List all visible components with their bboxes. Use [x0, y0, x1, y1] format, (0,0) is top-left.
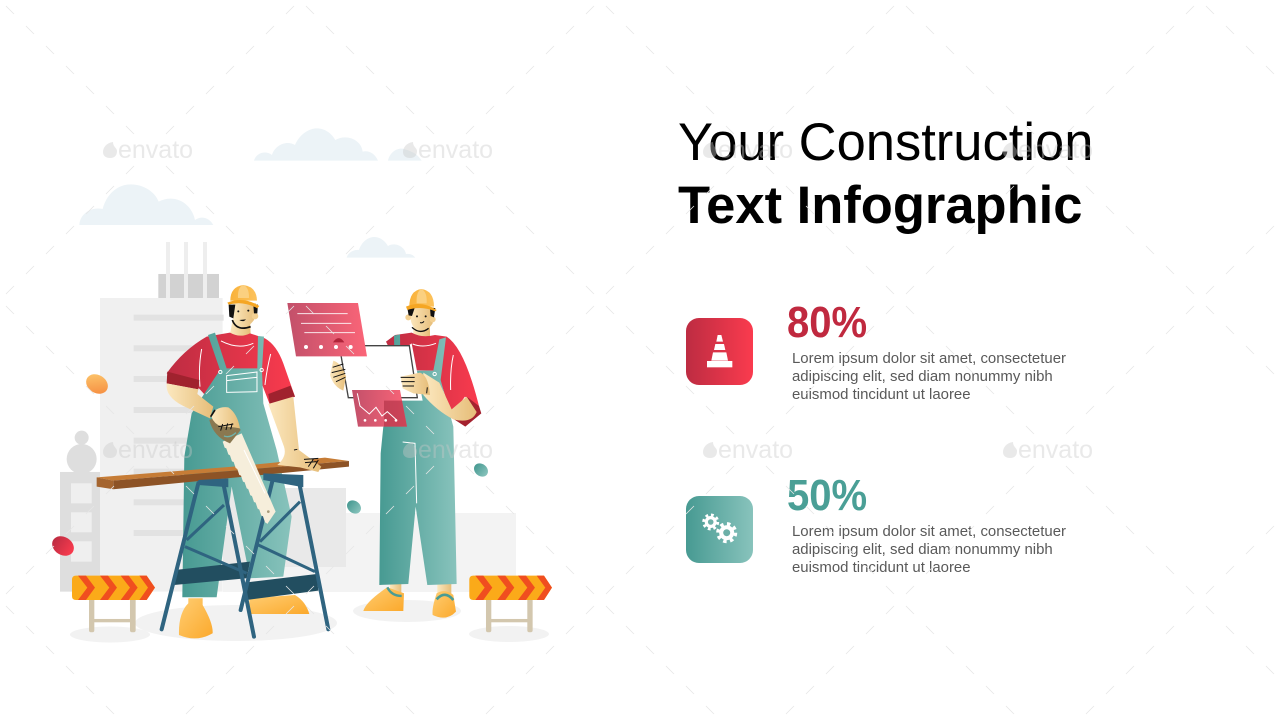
- tablet: [339, 343, 423, 401]
- stat: 50%: [787, 471, 1066, 576]
- bib pocket and stitching: [199, 341, 271, 392]
- trestle: [162, 473, 328, 637]
- hand left: [330, 361, 346, 391]
- description 2: adipiscing elit, sed diam nonummy nibh: [792, 541, 1053, 558]
- watermarks: envato: [1018, 436, 1093, 464]
- watermarks: envato: [718, 436, 793, 464]
- description 1: [792, 350, 1066, 403]
- saw: [209, 407, 276, 524]
- worker right: [287, 289, 481, 618]
- arm upper: [167, 383, 213, 418]
- watermarks: envato: [418, 136, 493, 164]
- title: [678, 113, 1093, 235]
- rear boot: [249, 595, 309, 614]
- watermarks: envato: [118, 436, 193, 464]
- front boot: [179, 598, 213, 638]
- overalls: [379, 334, 457, 585]
- description 1: euismod tincidunt ut laoree: [792, 386, 971, 403]
- worker left: [97, 285, 349, 638]
- shirt: [167, 333, 295, 405]
- decorative blobs: [48, 370, 491, 560]
- watermarks: envato: [718, 136, 793, 164]
- icon: gears: [686, 496, 753, 563]
- tall building: [60, 298, 224, 592]
- watermarks: envato: [418, 436, 493, 464]
- neck: [413, 323, 430, 340]
- left tower: [60, 431, 100, 592]
- ground shadows: [70, 600, 549, 642]
- head: [405, 289, 437, 331]
- watermarks: [103, 136, 1093, 464]
- clouds: [79, 128, 422, 258]
- description 2: [792, 523, 1066, 576]
- low buildings: [223, 513, 516, 592]
- right arm on plank: [268, 397, 321, 472]
- shirt: [386, 333, 480, 415]
- background cityscape: [60, 128, 516, 592]
- barrier sign right: [469, 576, 552, 632]
- icon: traffic cone: [686, 318, 753, 385]
- overalls: [182, 333, 292, 597]
- description 1: Lorem ipsum dolor sit amet, consectetuer: [792, 350, 1066, 367]
- sleeve cuffs: [167, 372, 199, 389]
- overall details: [403, 343, 453, 503]
- stat: 80%: [787, 298, 1066, 403]
- title: Your Construction: [678, 113, 1093, 172]
- hand right: [401, 373, 430, 395]
- watermarks: envato: [118, 136, 193, 164]
- card: chart panel: [352, 390, 407, 427]
- watermarks: envato: [1018, 136, 1093, 164]
- shins and shoes: [363, 582, 456, 618]
- description 2: euismod tincidunt ut laoree: [792, 559, 971, 576]
- neck: [230, 320, 251, 338]
- sleeve cuff: [453, 397, 481, 427]
- title: Text Infographic: [678, 176, 1082, 235]
- value 50%: 50%: [787, 471, 867, 520]
- description 1: adipiscing elit, sed diam nonummy nibh: [792, 368, 1053, 385]
- card: text panel: [287, 303, 367, 356]
- description 2: Lorem ipsum dolor sit amet, consectetuer: [792, 523, 1066, 540]
- value 80%: 80%: [787, 298, 867, 347]
- barrier sign left: [72, 576, 155, 632]
- head: [227, 285, 259, 328]
- wooden plank: [97, 458, 349, 489]
- forearm: [423, 373, 477, 421]
- chimneys: [158, 242, 219, 298]
